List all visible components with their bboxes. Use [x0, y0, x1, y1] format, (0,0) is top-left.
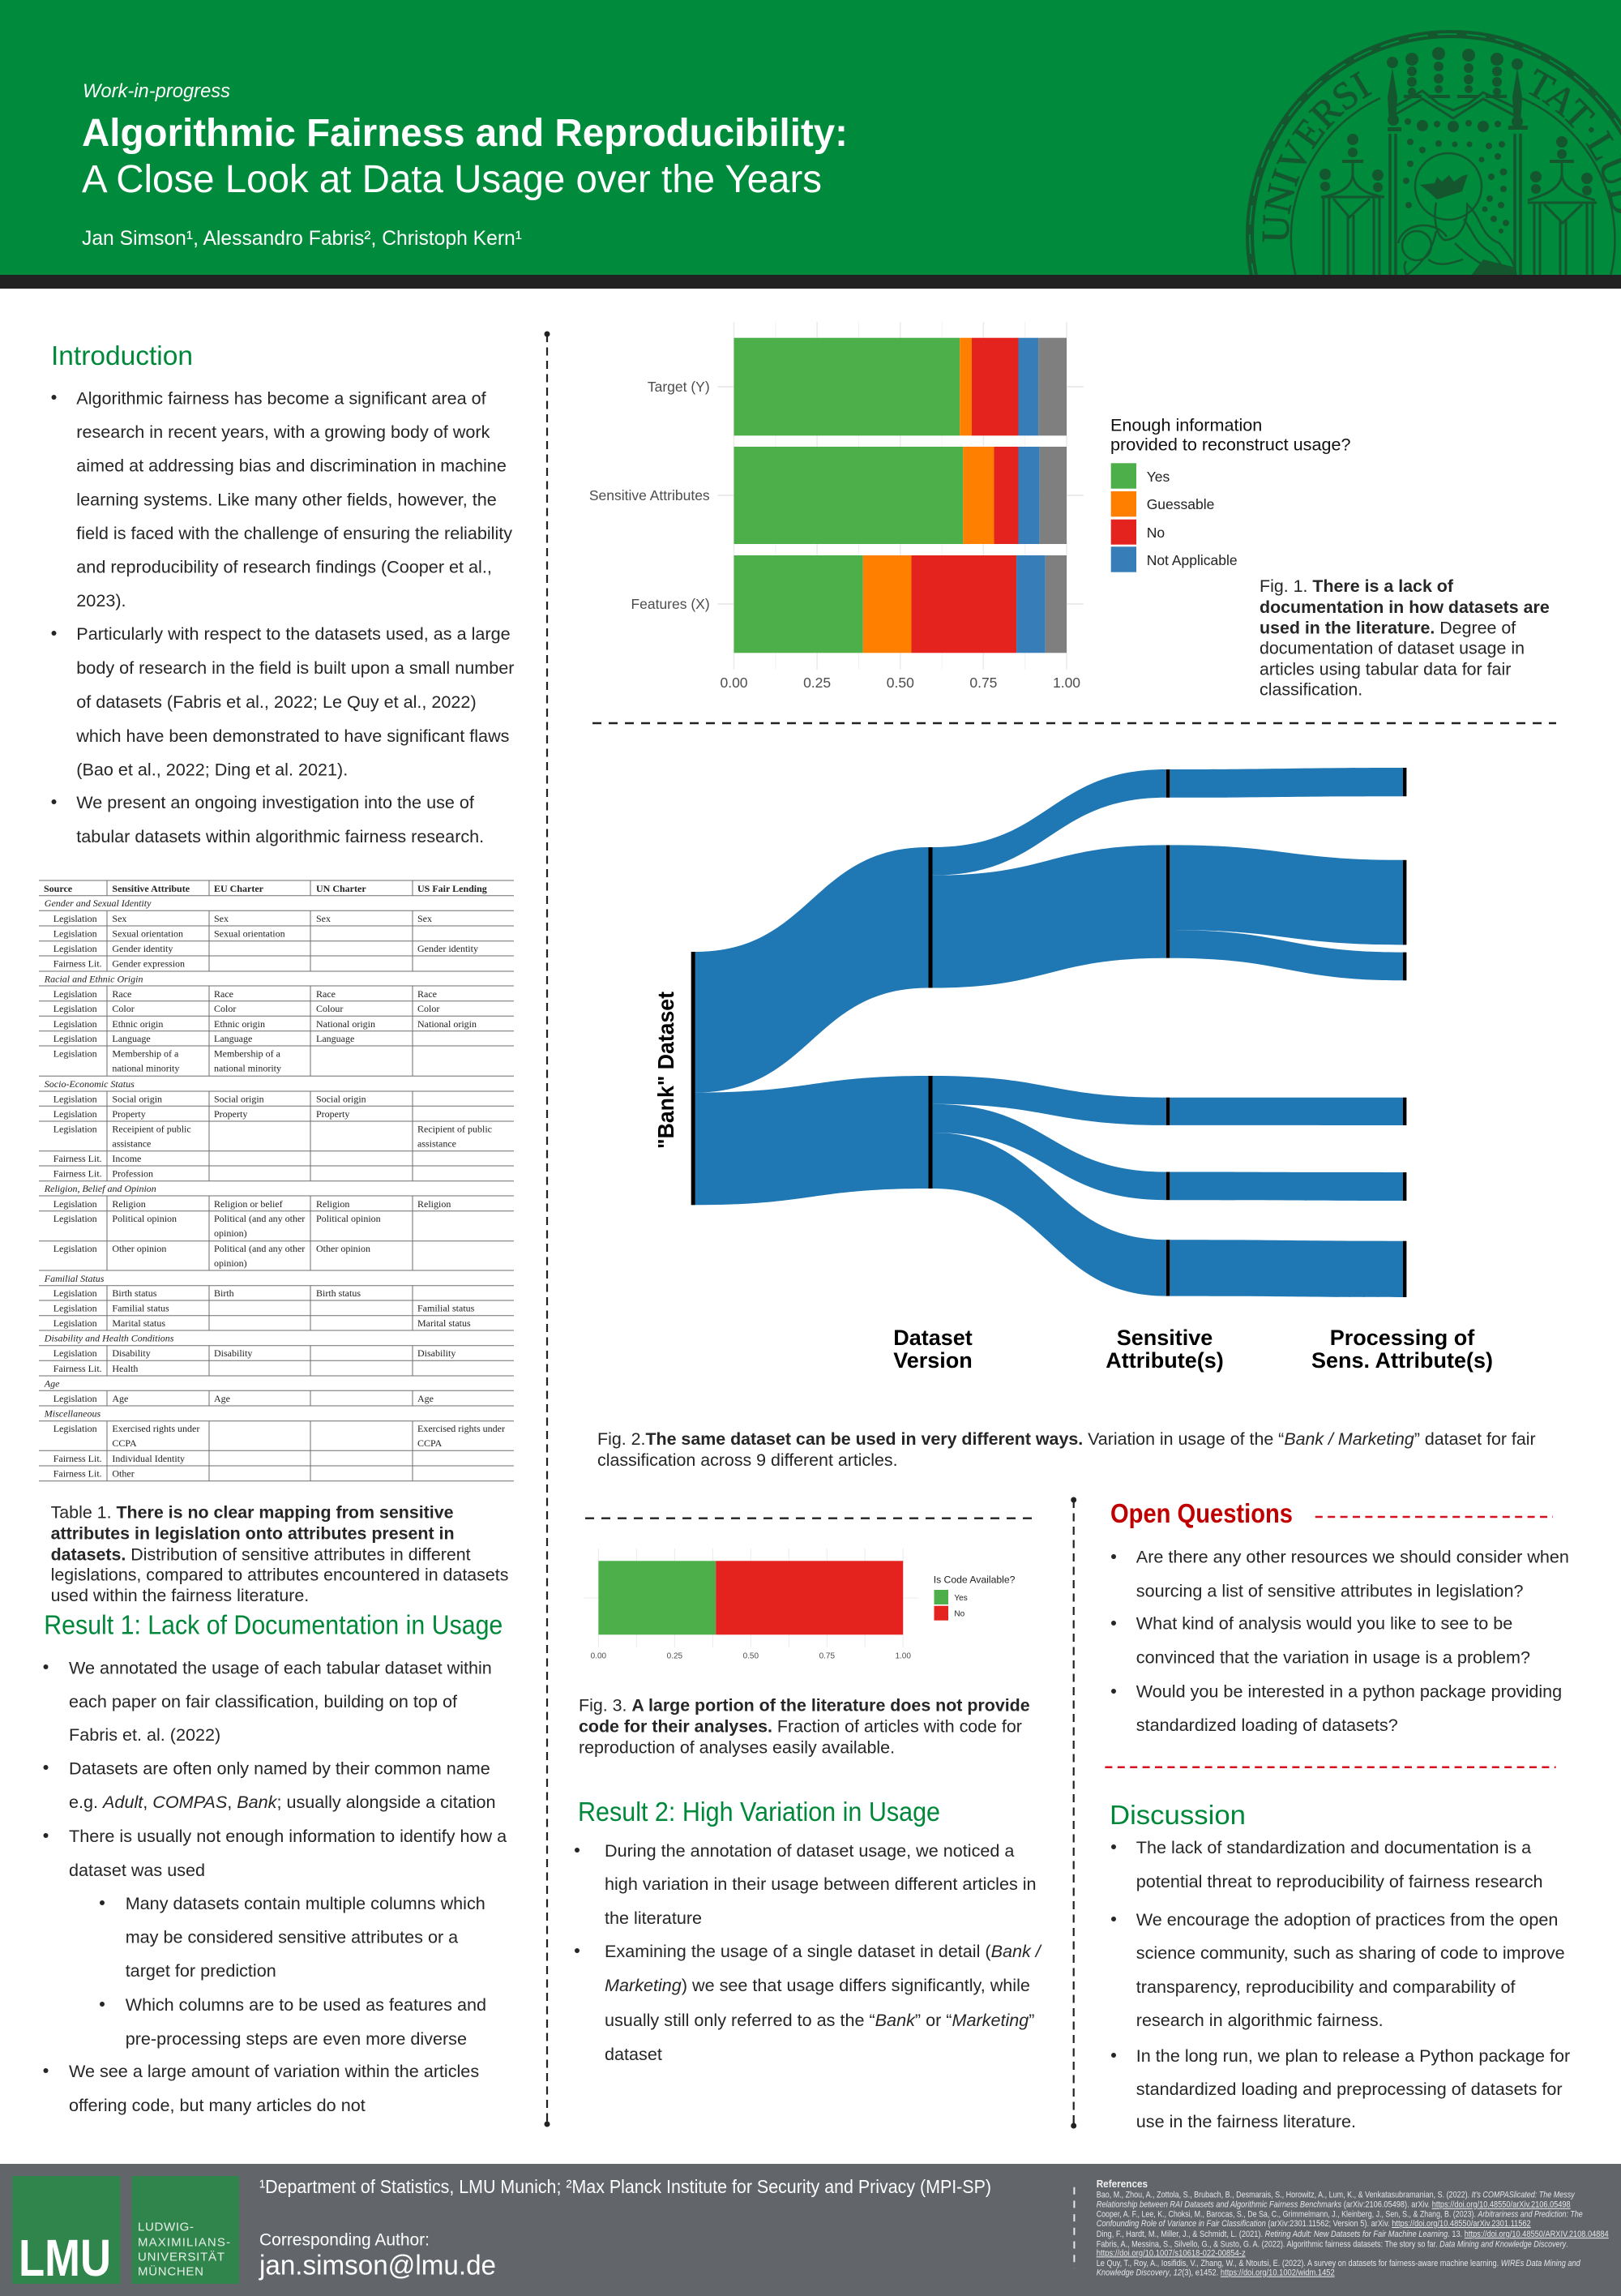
table 1 caption	[51, 1503, 508, 1605]
figure 1 caption	[1260, 576, 1550, 700]
heading: discussion: Discussion	[1110, 1800, 1246, 1830]
sankey label: sensitive attributes	[1106, 1326, 1224, 1373]
table 1: sensitive attributes: Religion	[417, 1198, 451, 1210]
table 1: sensitive attributes: Disability	[417, 1347, 456, 1359]
references	[1097, 2178, 1609, 2278]
x axis labels: 0.00	[720, 675, 748, 691]
table 1: sensitive attributes: Fairness Lit.	[53, 1363, 102, 1374]
table 1: sensitive attributes: Property	[112, 1108, 146, 1120]
table 1: sensitive attributes: Fairness Lit.	[53, 1453, 102, 1464]
figure 1 caption: Fig. 1. There is a lack of	[1260, 576, 1454, 596]
table 1: sensitive attributes: Legislation	[53, 1093, 97, 1104]
table 1: sensitive attributes: Ethnic origin	[112, 1018, 163, 1030]
table 1: sensitive attributes: national minority	[214, 1062, 281, 1073]
header banner	[0, 0, 1621, 289]
table 1: sensitive attributes: Other	[112, 1467, 135, 1479]
bar: no share	[716, 1561, 903, 1634]
introduction bullets: of datasets (Fabris et al., 2022; Le Quy et al., 2022)	[76, 692, 477, 712]
table 1: sensitive attributes: Individual Identity	[112, 1453, 185, 1464]
legend	[934, 1574, 1016, 1621]
axis labels: 0.25	[667, 1652, 683, 1660]
legend: Yes	[954, 1594, 968, 1603]
sankey label: sensitive attributes: Sensitive	[1117, 1326, 1213, 1350]
corresponding author	[259, 2230, 496, 2281]
bar: features	[734, 555, 1067, 653]
table 1: sensitive attributes: Social origin	[214, 1093, 264, 1104]
bar: target	[734, 338, 1067, 435]
legend: Is Code Available?	[934, 1574, 1016, 1586]
table 1: sensitive attributes: Racial and Ethnic Origin	[44, 973, 143, 984]
table 1: sensitive attributes: Gender expression	[112, 958, 185, 970]
work-in-progress label: Work-in-progress	[83, 80, 230, 102]
table 1: sensitive attributes: Color	[112, 1003, 135, 1014]
discussion bullets: science community, such as sharing of code to improve	[1136, 1943, 1565, 1963]
figure 1 caption: documentation of dataset usage in	[1260, 639, 1525, 658]
introduction bullets: We present an ongoing investigation into the use of	[76, 792, 475, 812]
introduction bullets: 2023).	[76, 590, 126, 610]
table 1: sensitive attributes: Political (and any other	[214, 1213, 305, 1224]
axis labels: 0.75	[819, 1652, 835, 1660]
table 1: sensitive attributes: Political opinion	[112, 1213, 177, 1224]
legend: Guessable	[1147, 496, 1214, 512]
table 1: sensitive attributes: Legislation	[53, 1033, 97, 1044]
discussion bullets	[1111, 1837, 1570, 2131]
discussion bullets: use in the fairness literature.	[1136, 2111, 1356, 2131]
table 1: sensitive attributes: national minority	[112, 1062, 179, 1073]
open questions bullets: sourcing a list of sensitive attributes in legislation?	[1136, 1580, 1524, 1600]
table 1: sensitive attributes: Colour	[316, 1003, 343, 1014]
icon: university seal	[1246, 30, 1621, 275]
result 2 bullets	[575, 1840, 1042, 2064]
result 1 bullets: dataset was used	[69, 1860, 205, 1880]
discussion bullets: transparency, reproducibility and comparability of	[1136, 1977, 1516, 1997]
table 1: sensitive attributes: National origin	[316, 1018, 375, 1030]
references: Ding, F., Hardt, M., Miller, J., & Schmidt, L. (2021). Retiring Adult: New Datasets for Fair Machine Learning. 13. https://doi.org/10.48550/ARXIV.2108.04884	[1097, 2230, 1609, 2239]
legend: Yes	[1147, 469, 1170, 485]
table 1: sensitive attributes: Social origin	[112, 1093, 162, 1104]
introduction bullets: which have been demonstrated to have significant flaws	[75, 726, 510, 746]
result 2 bullets: usually still only referred to as the “Bank” or “Marketing”	[605, 2010, 1034, 2030]
table 1: sensitive attributes: Legislation	[53, 913, 97, 924]
result 1 bullets: There is usually not enough information to identify how a	[69, 1826, 507, 1846]
figure 1 caption: documentation in how datasets are	[1260, 598, 1550, 617]
x axis labels: 0.50	[887, 675, 914, 691]
table 1: sensitive attributes: Religion	[316, 1198, 349, 1210]
panel: discussion	[1110, 1800, 1570, 2131]
corresponding author: Corresponding Author:	[259, 2230, 430, 2249]
legend: Not Applicable	[1147, 552, 1238, 568]
sankey label: processing: Processing of	[1330, 1326, 1475, 1350]
y axis labels: Features (X)	[631, 596, 710, 612]
open questions bullets: Are there any other resources we should consider when	[1136, 1546, 1569, 1566]
references: Le Quy, T., Roy, A., Iosifidis, V., Zhang, W., & Ntoutsi, E. (2022). A survey on datasets for fairness-aware machine learning. WIREs Data Mining and	[1097, 2259, 1581, 2268]
x axis labels	[720, 675, 1080, 691]
icon: university seal: UNIVERSI	[1263, 71, 1373, 242]
panel: result 1	[44, 1610, 507, 2115]
table 1: sensitive attributes: Political (and any other	[214, 1243, 305, 1254]
table 1: sensitive attributes: Gender and Sexual Identity	[45, 897, 152, 909]
logo: university name: LUDWIG-	[138, 2221, 194, 2234]
corresponding author: jan.simson@lmu.de	[259, 2250, 496, 2281]
table 1: sensitive attributes: Legislation	[53, 1317, 97, 1329]
table 1: sensitive attributes: Race	[214, 988, 233, 1000]
logo: university name: MÜNCHEN	[138, 2264, 203, 2279]
table 1: sensitive attributes: Language	[316, 1033, 354, 1044]
sankey label: bank dataset: "Bank" Dataset	[653, 992, 678, 1149]
discussion bullets: We encourage the adoption of practices from the open	[1136, 1909, 1558, 1930]
table 1: sensitive attributes: Religion or belief	[214, 1198, 283, 1210]
table 1: sensitive attributes: Familial status	[112, 1302, 169, 1313]
panel: open questions	[1105, 1498, 1569, 1767]
table 1: sensitive attributes: Other opinion	[112, 1243, 166, 1254]
x axis labels: 0.75	[969, 675, 997, 691]
references: https://doi.org/10.1007/s10618-022-00854-z	[1097, 2248, 1246, 2258]
legend: No	[1147, 525, 1165, 541]
bar: yes share	[598, 1561, 716, 1634]
table 1: sensitive attributes: assistance	[112, 1138, 151, 1150]
table 1: sensitive attributes: Social origin	[316, 1093, 366, 1104]
table 1: sensitive attributes: Political opinion	[316, 1213, 381, 1224]
sankey label: processing: Sens. Attribute(s)	[1311, 1348, 1493, 1373]
table 1: sensitive attributes: Membership of a	[214, 1047, 281, 1059]
discussion bullets: research in algorithmic fairness.	[1136, 2010, 1384, 2030]
table 1: sensitive attributes: Sexual orientation	[112, 927, 183, 939]
heading: open questions: Open Questions	[1110, 1498, 1293, 1528]
logo: LMU mark	[12, 2176, 120, 2287]
table 1: sensitive attributes: Sexual orientation	[214, 927, 285, 939]
axis labels: 0.50	[743, 1652, 759, 1660]
sankey label: dataset version: Version	[893, 1348, 973, 1373]
references: Cooper, A. F., Lee, K., Choksi, M., Barocas, S., De Sa, C., Grimmelmann, J., Kleinberg, J., Sen, S., & Zhang, B. (2023). Arbitrariness and Prediction: The	[1097, 2210, 1583, 2220]
table 1: sensitive attributes: Gender identity	[112, 943, 173, 954]
figure 1: stacked bar chart	[589, 322, 1350, 691]
table 1: sensitive attributes: Legislation	[53, 1108, 97, 1120]
y axis labels: Target (Y)	[648, 379, 710, 395]
table 1: sensitive attributes: CCPA	[417, 1437, 443, 1449]
table 1: sensitive attributes: Color	[214, 1003, 236, 1014]
table 1: sensitive attributes: Profession	[112, 1167, 153, 1179]
x axis labels: 0.25	[803, 675, 831, 691]
heading: result 2: Result 2: High Variation in Usage	[578, 1797, 940, 1827]
table 1: sensitive attributes: Exercised rights under	[112, 1423, 199, 1434]
result 1 bullets: We see a large amount of variation within the articles	[69, 2061, 479, 2081]
table 1: sensitive attributes: Receipient of public	[112, 1124, 191, 1135]
table 1: sensitive attributes: Membership of a	[112, 1047, 179, 1059]
introduction bullets: and reproducibility of research findings (Cooper et al.,	[76, 556, 492, 577]
table 1: sensitive attributes: Legislation	[53, 1018, 97, 1030]
table 1: sensitive attributes: Birth status	[316, 1287, 361, 1299]
result 2 bullets: high variation in their usage between different articles in	[605, 1874, 1037, 1894]
table 1 caption: used within the fairness literature.	[51, 1586, 309, 1605]
result 1 bullets: target for prediction	[126, 1960, 276, 1981]
table 1: sensitive attributes: Legislation	[53, 1124, 97, 1135]
table 1: sensitive attributes: Race	[417, 988, 437, 1000]
table 1: sensitive attributes: Property	[214, 1108, 247, 1120]
result 2 bullets: Examining the usage of a single dataset in detail (Bank /	[605, 1941, 1042, 1961]
table 1: sensitive attributes: Legislation	[53, 927, 97, 939]
table 1: sensitive attributes: Race	[316, 988, 336, 1000]
axis labels	[591, 1652, 911, 1660]
references: Fabris, A., Messina, S., Silvello, G., & Susto, G. A. (2022). Algorithmic fairness datasets: The story so far. Data Mining and Knowledge Discovery.	[1097, 2239, 1568, 2249]
discussion bullets: The lack of standardization and documentation is a	[1136, 1837, 1532, 1857]
table 1: sensitive attributes: Religion	[112, 1198, 146, 1210]
result 1 bullets: each paper on fair classification, building on top of	[69, 1691, 458, 1711]
discussion bullets: potential threat to reproducibility of fairness research	[1136, 1871, 1543, 1891]
footer	[0, 2164, 1621, 2296]
authors: Jan Simson¹, Alessandro Fabris², Christoph Kern¹	[82, 227, 522, 250]
axis labels: 1.00	[895, 1652, 911, 1660]
table 1: sensitive attributes: Age	[214, 1393, 230, 1404]
affiliations: ¹Department of Statistics, LMU Munich; ²Max Planck Institute for Security and Privacy (MPI-SP)	[259, 2176, 991, 2197]
table 1: sensitive attributes: Fairness Lit.	[53, 1167, 102, 1179]
bar: sensitive attributes	[734, 447, 1067, 544]
table 1: sensitive attributes: Disability	[112, 1347, 151, 1359]
heading: introduction: Introduction	[51, 341, 193, 371]
introduction bullets: Algorithmic fairness has become a significant area of	[76, 388, 487, 408]
table 1: sensitive attributes: Legislation	[53, 1347, 97, 1359]
y axis labels	[589, 379, 710, 612]
table 1: sensitive attributes: Legislation	[53, 1047, 97, 1059]
references: Confounding Role of Variance in Fair Classification (arXiv:2301.11562; Version 5). arXiv. https://doi.org/10.48550/arXiv.2301.11562	[1097, 2219, 1531, 2229]
table 1: sensitive attributes: Age	[44, 1378, 60, 1390]
introduction bullets: learning systems. Like many other fields, however, the	[76, 490, 497, 509]
table 1: sensitive attributes: Legislation	[53, 1423, 97, 1434]
table 1: sensitive attributes: Fairness Lit.	[53, 1153, 102, 1164]
table 1: sensitive attributes: Legislation	[53, 1003, 97, 1014]
logo: university name: UNIVERSITÄT	[138, 2251, 225, 2264]
table 1: sensitive attributes: Socio-Economic Status	[45, 1078, 135, 1090]
table 1: sensitive attributes: Ethnic origin	[214, 1018, 265, 1030]
y axis labels: Sensitive Attributes	[589, 487, 710, 503]
logo: university name: MAXIMILIANS-	[138, 2236, 230, 2250]
panel: result 2	[575, 1797, 1042, 2064]
result 1 bullets	[44, 1657, 507, 2115]
figure 3 caption	[579, 1696, 1030, 1757]
figure 3 caption: reproduction of analyses easily available.	[579, 1737, 895, 1757]
introduction bullets: research in recent years, with a growing body of work	[76, 422, 490, 442]
table 1: sensitive attributes: Age	[112, 1393, 128, 1404]
axis labels: 0.00	[591, 1652, 607, 1660]
table 1: sensitive attributes: Marital status	[417, 1317, 471, 1329]
logo: university name	[131, 2176, 239, 2284]
table 1 caption: datasets. Distribution of sensitive attributes in different	[51, 1544, 471, 1564]
introduction bullets: Particularly with respect to the datasets used, as a large	[76, 623, 511, 644]
result 2 bullets: Marketing) we see that usage differs significantly, while	[605, 1975, 1030, 1995]
figure 3 caption: Fig. 3. A large portion of the literature does not provide	[579, 1696, 1030, 1716]
table 1: sensitive attributes: Recipient of public	[417, 1124, 492, 1135]
result 2 bullets: the literature	[605, 1908, 702, 1928]
introduction bullets: aimed at addressing bias and discrimination in machine	[76, 456, 507, 475]
table 1: sensitive attributes: Sensitive Attribute	[112, 883, 190, 894]
table 1: sensitive attributes: Income	[112, 1153, 141, 1164]
table 1: sensitive attributes: Disability and Health Conditions	[44, 1333, 174, 1344]
figure 1 caption: classification.	[1260, 680, 1362, 700]
sankey flows	[695, 768, 1403, 1297]
table 1: sensitive attributes: Sex	[316, 913, 331, 924]
result 1 bullets: We annotated the usage of each tabular dataset within	[69, 1657, 492, 1678]
table 1: sensitive attributes: Religion, Belief and Opinion	[44, 1183, 156, 1194]
figure 3 caption: code for their analyses. Fraction of articles with code for	[579, 1717, 1022, 1737]
table 1: sensitive attributes: Sex	[112, 913, 126, 924]
references: Knowledge Discovery, 12(3), e1452. https://doi.org/10.1002/widm.1452	[1097, 2268, 1335, 2278]
column divider: right	[1071, 1497, 1076, 2129]
table 1: sensitive attributes: Legislation	[53, 1302, 97, 1313]
table 1: sensitive attributes: EU Charter	[214, 883, 264, 894]
column divider: left	[545, 331, 550, 2127]
references: Relationship between RAI Datasets and Algorithmic Fairness Benchmarks (arXiv:2106.05498). arXiv. https://doi.org/10.48550/arXiv.2106.05498	[1097, 2200, 1571, 2210]
result 1 bullets: pre-processing steps are even more diverse	[126, 2028, 467, 2049]
result 1 bullets: Fabris et. al. (2022)	[69, 1724, 220, 1745]
table 1: sensitive attributes: Sex	[214, 913, 229, 924]
result 1 bullets: Datasets are often only named by their common name	[69, 1758, 490, 1779]
legend: provided to reconstruct usage?	[1110, 435, 1350, 455]
table 1: sensitive attributes	[39, 880, 514, 1481]
table 1: sensitive attributes: Birth status	[112, 1287, 157, 1299]
discussion bullets: In the long run, we plan to release a Python package for	[1136, 2045, 1570, 2066]
logo: LMU mark: LMU	[19, 2229, 111, 2287]
sankey label: dataset version: Dataset	[893, 1326, 973, 1350]
table 1: sensitive attributes: Gender identity	[417, 943, 478, 954]
introduction bullets: tabular datasets within algorithmic fairness research.	[76, 826, 484, 846]
legend: No	[954, 1610, 965, 1619]
table 1: sensitive attributes: Familial status	[417, 1302, 475, 1313]
table 1: sensitive attributes: Marital status	[112, 1317, 165, 1329]
figure 1 caption: articles using tabular data for fair	[1260, 659, 1511, 679]
table 1: sensitive attributes: Legislation	[53, 1393, 97, 1404]
figure 2 caption: Fig. 2.The same dataset can be used in very different ways. Variation in usage of the “Bank / Marketing” dataset for fair	[597, 1429, 1536, 1449]
table 1: sensitive attributes: opinion)	[214, 1257, 247, 1269]
table 1: sensitive attributes: Property	[316, 1108, 349, 1120]
table 1: sensitive attributes: Health	[112, 1363, 138, 1374]
figure 1 caption: used in the literature. Degree of	[1260, 619, 1516, 638]
table 1: sensitive attributes: Language	[214, 1033, 252, 1044]
introduction bullets: body of research in the field is built upon a small number	[76, 658, 514, 678]
result 1 bullets: Which columns are to be used as features and	[126, 1994, 486, 2015]
table 1: sensitive attributes: Fairness Lit.	[53, 1467, 102, 1479]
introduction bullets: (Bao et al., 2022; Ding et al. 2021).	[76, 759, 348, 780]
result 1 bullets: Many datasets contain multiple columns which	[126, 1893, 485, 1913]
legend: Enough information	[1110, 415, 1262, 435]
table 1: sensitive attributes: Source	[44, 883, 73, 894]
table 1: sensitive attributes: Language	[112, 1033, 151, 1044]
table 1: sensitive attributes: Sex	[417, 913, 432, 924]
references: References	[1097, 2178, 1148, 2190]
open questions bullets: Would you be interested in a python package providing	[1136, 1681, 1562, 1701]
introduction bullets	[52, 388, 514, 846]
table 1: sensitive attributes: Legislation	[53, 1213, 97, 1224]
result 2 bullets: During the annotation of dataset usage, we noticed a	[605, 1840, 1015, 1861]
table 1: sensitive attributes: UN Charter	[316, 883, 366, 894]
result 1 bullets: offering code, but many articles do not	[69, 2095, 366, 2115]
result 1 bullets: e.g. Adult, COMPAS, Bank; usually alongside a citation	[69, 1792, 496, 1812]
table 1: sensitive attributes: Color	[417, 1003, 439, 1014]
table 1: sensitive attributes: Legislation	[53, 1198, 97, 1210]
sankey nodes	[691, 768, 1406, 1297]
table 1: sensitive attributes: Legislation	[53, 988, 97, 1000]
open questions bullets: What kind of analysis would you like to see to be	[1136, 1613, 1512, 1634]
figure 2: sankey diagram	[653, 768, 1493, 1373]
introduction bullets: field is faced with the challenge of ensuring the reliability	[76, 523, 512, 543]
figure 2 caption	[597, 1429, 1536, 1470]
result 1 bullets: may be considered sensitive attributes or a	[126, 1927, 459, 1947]
figure 3: code availability bar	[584, 1549, 1016, 1660]
result 2 bullets: dataset	[605, 2044, 662, 2064]
figure 2 caption: classification across 9 different articles.	[597, 1450, 898, 1470]
sankey label: processing	[1311, 1326, 1493, 1373]
table 1: sensitive attributes: Legislation	[53, 1287, 97, 1299]
legend	[1110, 415, 1350, 572]
subtitle: A Close Look at Data Usage over the Years	[82, 158, 822, 201]
title: Algorithmic Fairness and Reproducibility:	[82, 112, 848, 155]
table 1 caption: Table 1. There is no clear mapping from sensitive	[51, 1503, 454, 1523]
open questions bullets: convinced that the variation in usage is a problem?	[1136, 1647, 1530, 1667]
table 1: sensitive attributes: Other opinion	[316, 1243, 370, 1254]
table 1: sensitive attributes: Age	[417, 1393, 434, 1404]
table 1: sensitive attributes: Disability	[214, 1347, 252, 1359]
panel: introduction	[51, 341, 514, 846]
table 1: sensitive attributes: Exercised rights under	[417, 1423, 505, 1434]
table 1: sensitive attributes: Familial Status	[44, 1273, 105, 1284]
table 1: sensitive attributes: opinion)	[214, 1227, 247, 1239]
sankey label: dataset version	[893, 1326, 973, 1373]
open questions bullets	[1111, 1546, 1569, 1735]
table 1: sensitive attributes: assistance	[417, 1138, 456, 1150]
table 1 caption: legislations, compared to attributes encountered in datasets	[51, 1565, 508, 1584]
table 1: sensitive attributes: Birth	[214, 1287, 234, 1299]
table 1: sensitive attributes: Legislation	[53, 943, 97, 954]
table 1: sensitive attributes: Race	[112, 988, 131, 1000]
table 1: sensitive attributes: Miscellaneous	[44, 1407, 101, 1419]
table 1: sensitive attributes: Fairness Lit.	[53, 958, 102, 970]
discussion bullets: standardized loading and preprocessing of datasets for	[1136, 2079, 1563, 2099]
table 1: sensitive attributes: National origin	[417, 1018, 477, 1030]
table 1: sensitive attributes: US Fair Lending	[417, 883, 487, 894]
open questions bullets: standardized loading of datasets?	[1136, 1715, 1398, 1735]
references: Bao, M., Zhou, A., Zottola, S., Brubach, B., Desmarais, S., Horowitz, A., Lum, K., & Venkatasubramanian, S. (2022). It’s COMPASlicated: The Messy	[1097, 2191, 1575, 2200]
table 1 caption: attributes in legislation onto attributes present in	[51, 1523, 455, 1543]
table 1: sensitive attributes: Legislation	[53, 1243, 97, 1254]
table 1: sensitive attributes: CCPA	[112, 1437, 137, 1449]
heading: result 1: Result 1: Lack of Documentation in Usage	[44, 1610, 503, 1639]
sankey label: sensitive attributes: Attribute(s)	[1106, 1348, 1224, 1373]
x axis labels: 1.00	[1053, 675, 1080, 691]
